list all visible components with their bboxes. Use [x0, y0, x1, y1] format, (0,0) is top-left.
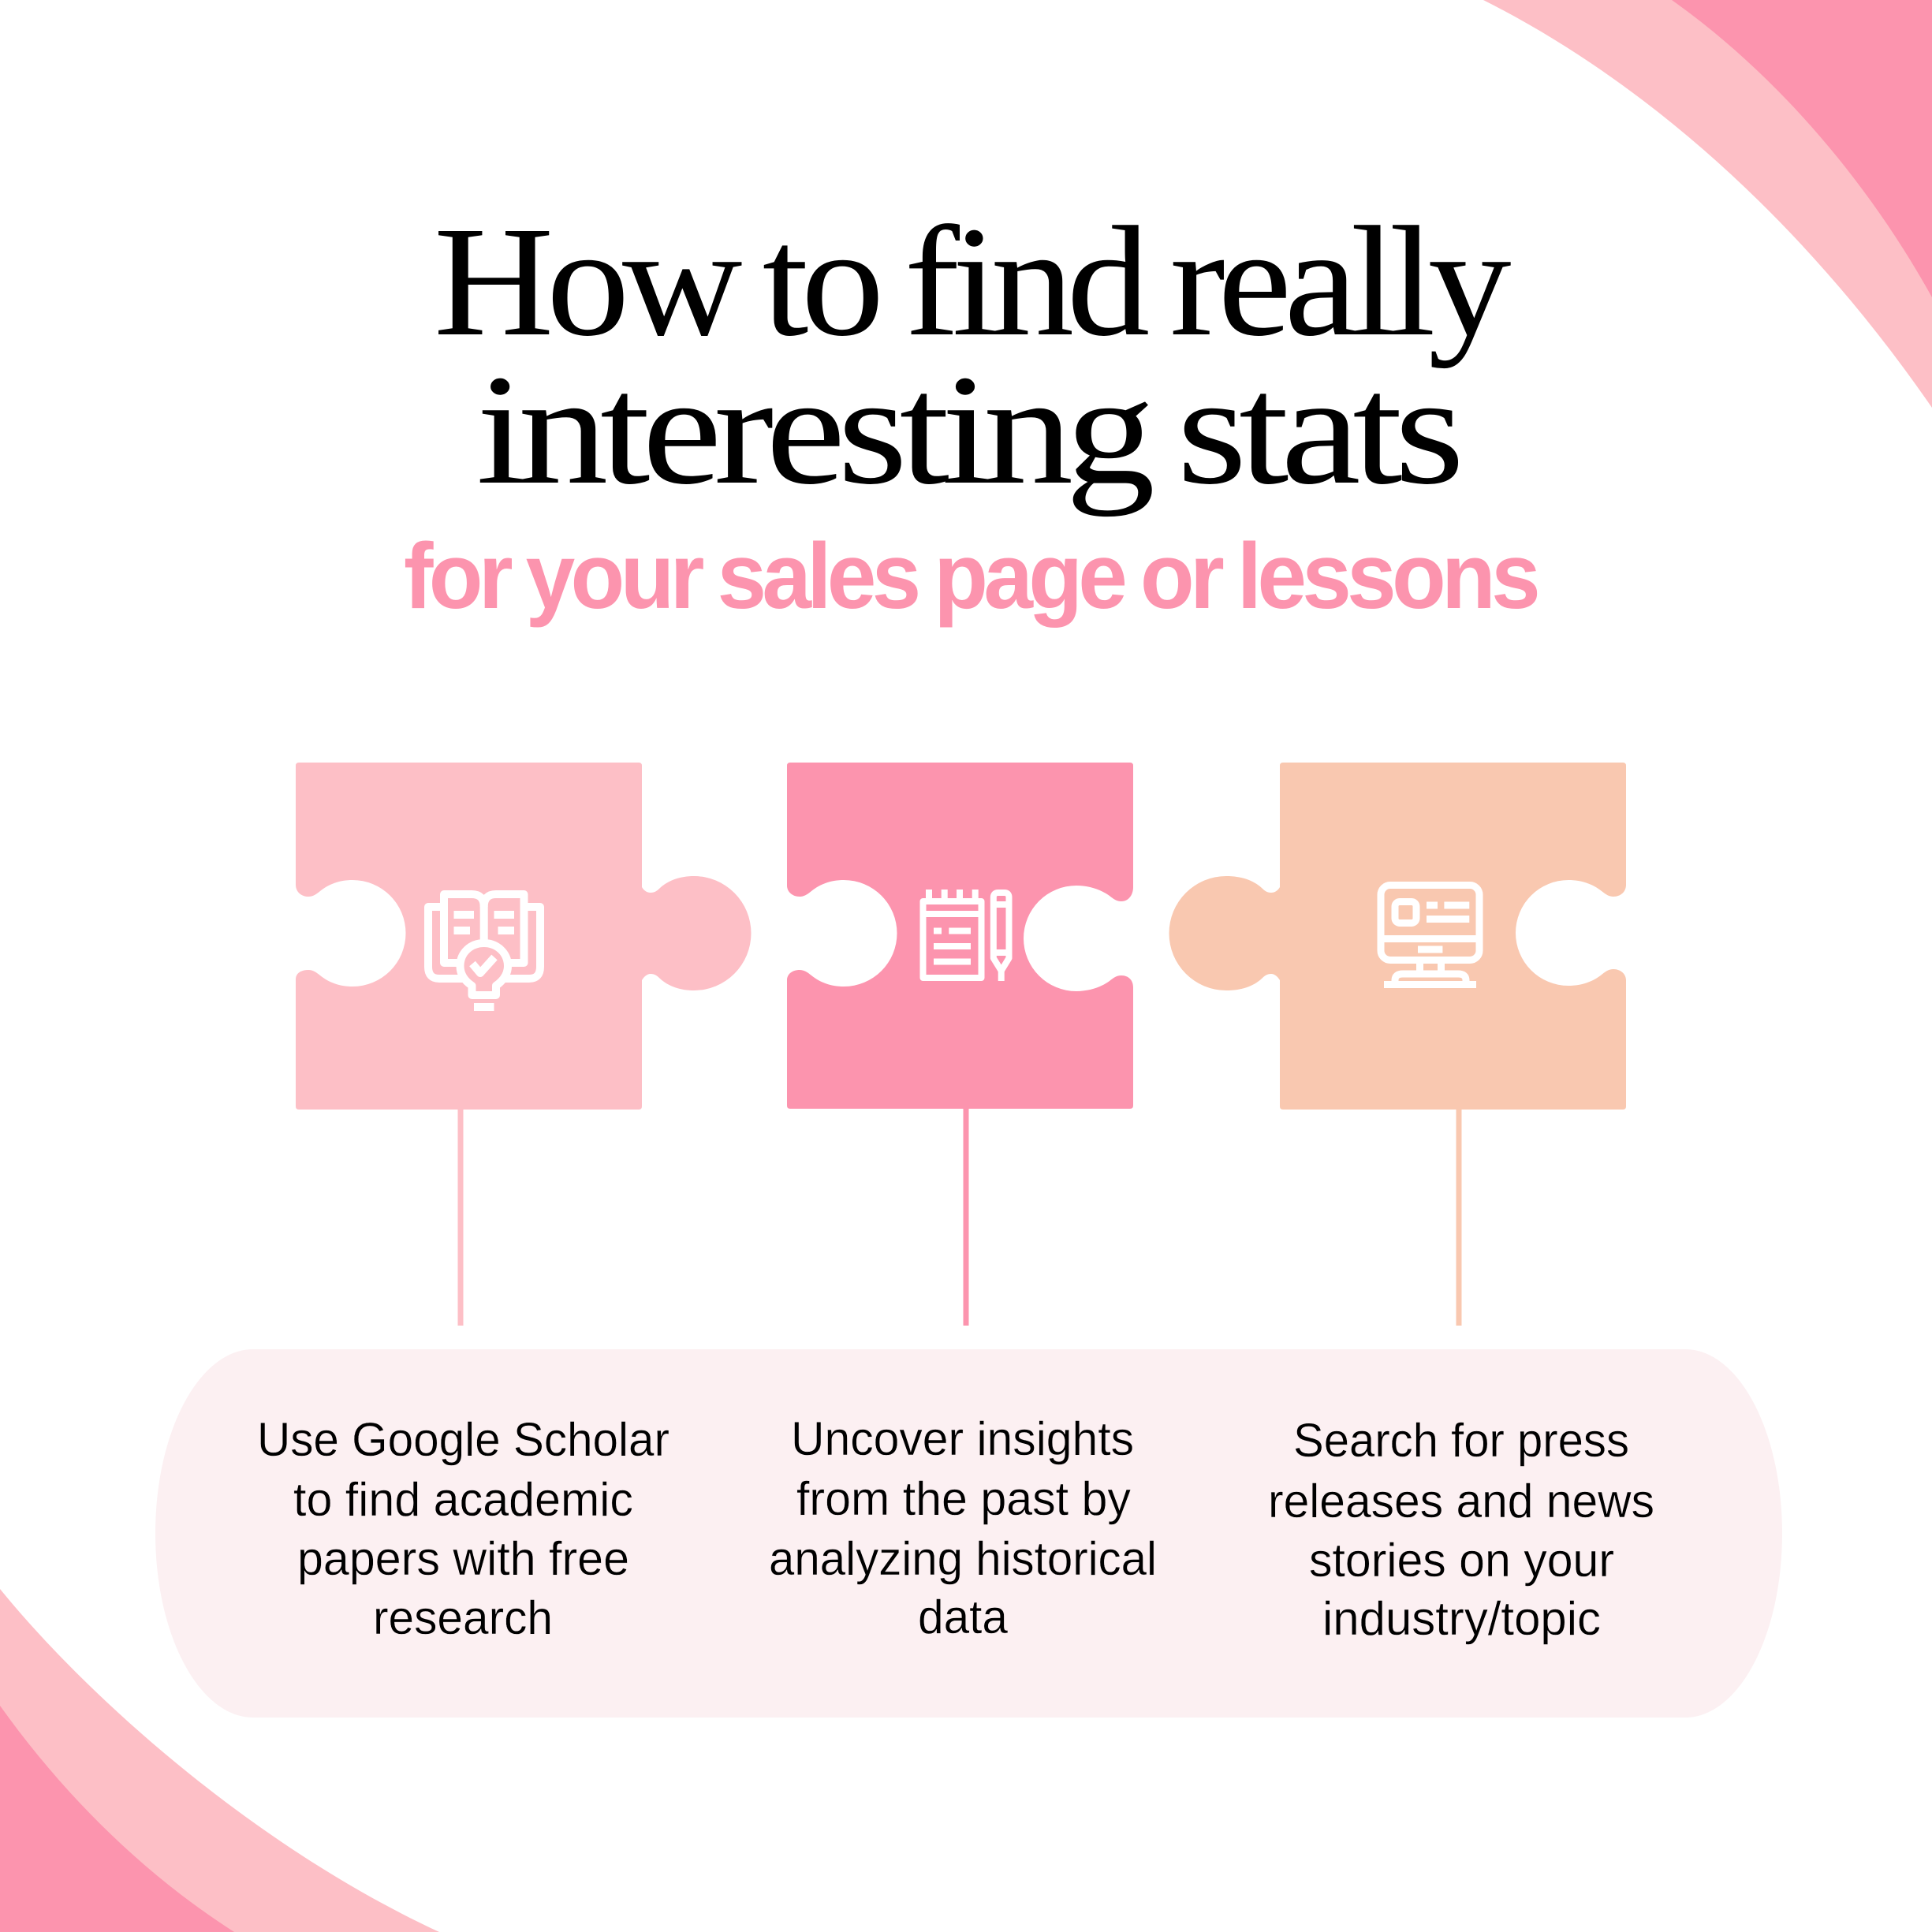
- puzzle piece 2 with notepad icon: [787, 763, 1133, 1109]
- puzzle piece 1 with book and bulb icon: [296, 763, 751, 1110]
- text: step 1: to find academic: [293, 1473, 633, 1526]
- text: step 2: data: [918, 1591, 1009, 1643]
- text: step 3: Search for press: [1293, 1414, 1629, 1467]
- icon: open book with light bulb: [428, 894, 540, 1007]
- text: step 1: research: [373, 1591, 553, 1644]
- corner: top right waves: [1483, 0, 1932, 408]
- text: step 1: papers with free: [297, 1532, 629, 1585]
- title: [434, 195, 1511, 517]
- puzzle piece 3 with computer icon: [1169, 763, 1626, 1110]
- text: step 2: analyzing historical: [769, 1532, 1157, 1585]
- text: step 2: [769, 1412, 1157, 1643]
- corner: bottom left waves: [0, 1589, 439, 1932]
- title: interesting stats: [476, 343, 1458, 517]
- text: step 1: [257, 1413, 669, 1644]
- connector line: step 2: [964, 1104, 968, 1326]
- text: step 3: releases and news: [1268, 1475, 1654, 1527]
- subtitle: for your sales page or lessons: [404, 524, 1537, 628]
- text: step 3: industry/topic: [1322, 1592, 1601, 1645]
- text: step 3: [1268, 1414, 1654, 1645]
- text: step 1: Use Google Scholar: [257, 1413, 669, 1466]
- icon: notepad and pencil: [923, 890, 1009, 981]
- icon: desktop computer: [1381, 885, 1479, 984]
- text: step 2: Uncover insights: [791, 1412, 1134, 1465]
- connector line: step 1: [457, 1104, 464, 1326]
- panel: text pill: [155, 1349, 1782, 1718]
- text: step 3: stories on your: [1309, 1534, 1614, 1587]
- connector line: step 3: [1456, 1104, 1462, 1326]
- text: step 2: from the past by: [796, 1472, 1131, 1525]
- title: How to find really: [434, 195, 1511, 369]
